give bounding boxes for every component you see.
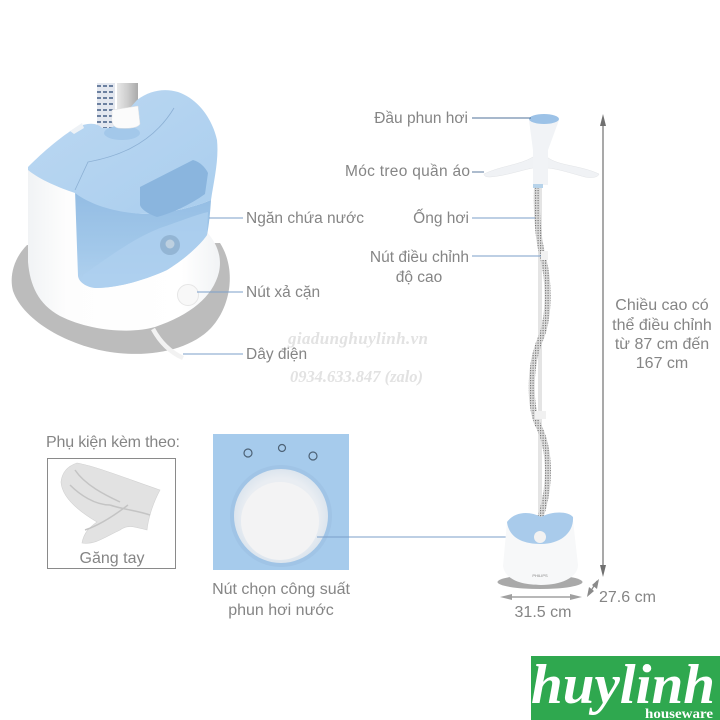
- icon: glove: [61, 463, 160, 543]
- lid seam: [75, 108, 174, 190]
- white body: [28, 150, 220, 331]
- water tank: [75, 190, 211, 288]
- callout: Nút xả cặn: Nút xả cặn: [246, 284, 320, 301]
- callout: Dây điện: [183, 346, 307, 363]
- large steamer base illustration: [12, 83, 230, 358]
- knob: [534, 531, 546, 543]
- width label: 31.5 cm: [515, 604, 571, 621]
- depth label: 27.6 cm: [599, 589, 656, 606]
- callout: Dây điện: Dây điện: [246, 346, 307, 363]
- callout: Nút điều chỉnh độ cao: Nút điều chỉnh: [370, 249, 469, 266]
- latch: [70, 123, 84, 134]
- logo wordmark: huylinh: [531, 654, 715, 716]
- body: [503, 515, 578, 585]
- pole: [538, 180, 542, 515]
- brand: PHILIPS: [532, 573, 548, 578]
- callout: Nút xả cặn: [197, 284, 320, 301]
- height label: Chiều cao có: [615, 297, 709, 314]
- caption: Găng tay: Găng tay: [80, 550, 144, 567]
- base plate: [498, 575, 582, 589]
- caption: dial: phun hơi nước: [228, 602, 334, 619]
- accessories heading: Phụ kiện kèm theo:: [46, 434, 180, 451]
- tank handle recess: [140, 160, 208, 217]
- tank lower light area: [80, 212, 208, 288]
- white clamp: [112, 106, 140, 128]
- height label: từ 87 cm đến: [615, 336, 709, 353]
- logo: huylinh houseware: [531, 654, 720, 720]
- blue top: [507, 512, 573, 544]
- callout: Đầu phun hơi: Đầu phun hơi: [374, 110, 468, 127]
- callout: Ống hơi: [413, 209, 535, 227]
- callout: Nút điều chỉnh độ cao: độ cao: [396, 269, 442, 286]
- watermark: [287, 329, 428, 386]
- tank valve: [160, 235, 180, 255]
- mode icons: [244, 444, 317, 460]
- grey base plate: [12, 243, 230, 354]
- panel: steam power dial: [213, 434, 535, 570]
- accessory box: glove: [48, 458, 176, 568]
- leader: [317, 536, 535, 538]
- pole: [117, 83, 138, 113]
- neck: [529, 120, 559, 185]
- height label: 167 cm: [636, 355, 688, 372]
- height label: [612, 297, 712, 372]
- lid hole: [104, 126, 140, 140]
- caption: dial: Nút chọn công suất: [212, 581, 350, 598]
- caption: dial: [212, 581, 350, 619]
- nozzle head: [529, 114, 559, 124]
- blue collar: [533, 184, 543, 188]
- hose segment: [97, 83, 115, 131]
- callout: Móc treo quần áo: Móc treo quần áo: [345, 163, 470, 180]
- power cord: [153, 329, 183, 358]
- arrow: height: [600, 114, 606, 577]
- arrow: width: [500, 594, 582, 600]
- arrow: depth: [587, 579, 599, 597]
- dial knob: [230, 465, 332, 567]
- callout: Nút điều chỉnh độ cao: [370, 249, 541, 286]
- watermark: 0934.633.847 (zalo): [290, 367, 423, 386]
- height label: thể điều chỉnh: [612, 316, 712, 334]
- callout: Ngăn chứa nước: Ngăn chứa nước: [246, 210, 364, 227]
- hanger arms: [484, 157, 599, 178]
- height clips: [541, 251, 548, 260]
- drain knob: [178, 284, 198, 306]
- small full steamer: [484, 114, 599, 589]
- steam hose: [532, 188, 548, 518]
- callout: Ống hơi: Ống hơi: [413, 209, 469, 227]
- blue lid: [28, 90, 217, 214]
- watermark: giadunghuylinh.vn: [287, 329, 428, 348]
